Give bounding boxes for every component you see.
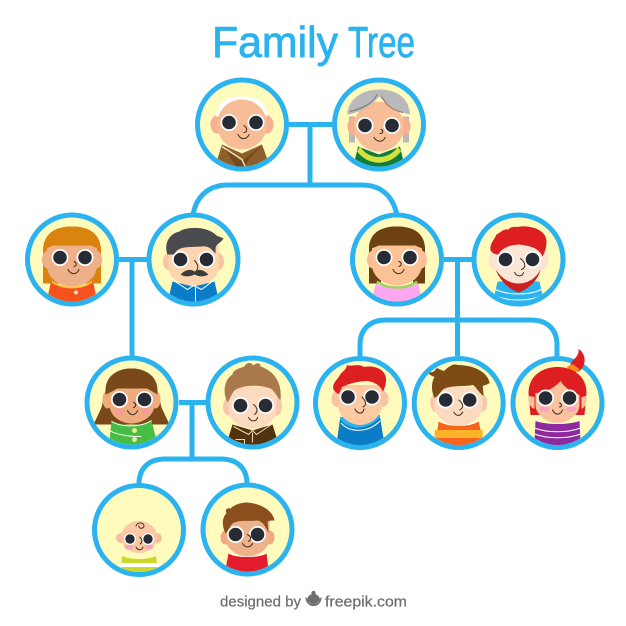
portrait: grandfather — [198, 80, 286, 170]
footer credit — [220, 591, 407, 610]
title — [212, 18, 415, 67]
portrait: brown-haired son — [414, 358, 503, 449]
portrait: mother — [352, 215, 442, 306]
portrait: red-haired father — [474, 215, 563, 306]
footer credit: freepik.com — [325, 594, 407, 610]
icon: freepik logo — [306, 591, 322, 606]
footer credit: designed by — [220, 594, 302, 610]
portrait: grandson in red — [203, 485, 292, 576]
portrait: red-haired daughter with ponytail — [513, 349, 602, 449]
portrait: son-in-law — [208, 358, 297, 448]
title: Tree — [348, 18, 415, 67]
connector lines — [119, 124, 557, 484]
portrait: daughter in green — [87, 358, 176, 448]
ponytail — [570, 349, 585, 372]
portrait: uncle with mustache — [149, 215, 238, 306]
portrait: grandmother — [334, 80, 424, 170]
title: Family — [212, 18, 338, 67]
portrait: baby — [94, 486, 184, 576]
portrait: aunt — [28, 215, 116, 306]
portrait: red-haired son — [316, 358, 404, 449]
